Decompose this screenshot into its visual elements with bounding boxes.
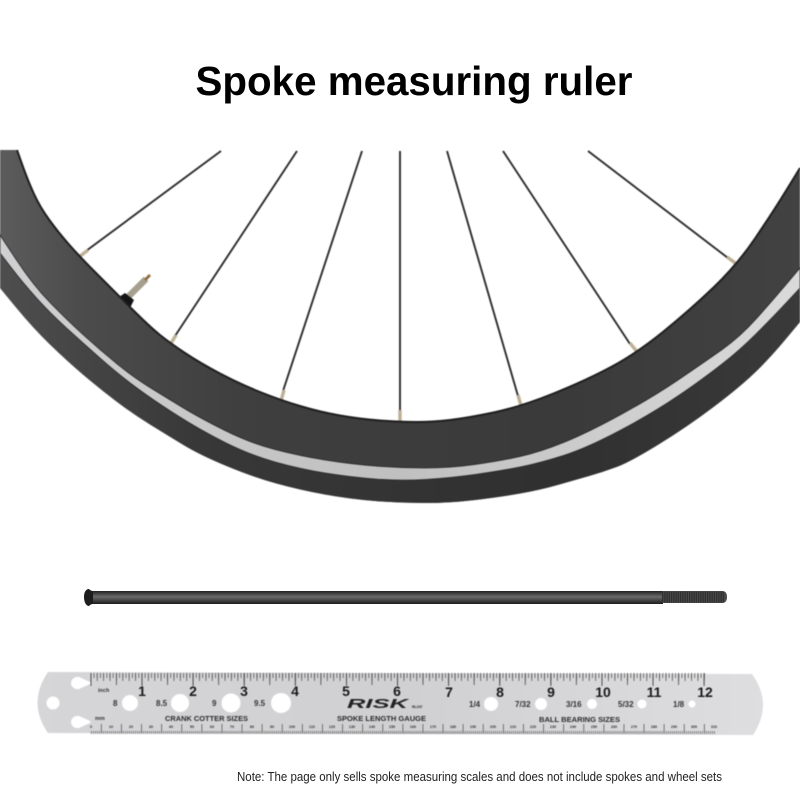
ruler	[38, 672, 763, 735]
section headings: BALL BEARING SIZES	[539, 715, 620, 724]
crank cotter labels: 8.5	[156, 699, 168, 708]
RISK logo	[347, 696, 423, 711]
inch scale ticks	[90, 676, 706, 680]
millimetre numbers: 120	[329, 725, 335, 729]
millimetre numbers: 300	[691, 725, 697, 729]
millimetre scale ticks	[91, 728, 716, 732]
section headings: CRANK COTTER SIZES	[165, 714, 248, 723]
millimetre numbers: 10	[109, 725, 113, 729]
millimetre numbers	[90, 725, 717, 729]
millimetre numbers: 140	[369, 725, 375, 729]
millimetre numbers: 210	[510, 725, 516, 729]
millimetre numbers: 70	[230, 725, 234, 729]
inch numbers: 7	[445, 684, 453, 700]
millimetre numbers: 60	[210, 725, 214, 729]
millimetre numbers: 0	[90, 725, 92, 729]
millimetre numbers: 220	[530, 725, 536, 729]
spoke shaft	[93, 591, 663, 604]
millimetre numbers: 200	[490, 725, 496, 729]
millimetre numbers: 40	[169, 725, 173, 729]
title: Spoke measuring ruler	[196, 58, 633, 104]
inch numbers: 9	[547, 684, 555, 700]
inch numbers: 6	[393, 683, 401, 699]
millimetre numbers: 90	[270, 725, 274, 729]
wheel photo	[0, 150, 800, 503]
millimetre numbers: 240	[570, 725, 576, 729]
inch numbers: 12	[697, 684, 713, 700]
ball bearing labels: 1/4	[469, 700, 481, 709]
spoke thread	[662, 591, 727, 603]
millimetre numbers: 180	[450, 725, 456, 729]
millimetre numbers: 270	[631, 725, 637, 729]
spokes	[79, 151, 738, 423]
millimetre numbers: 260	[611, 725, 617, 729]
millimetre numbers: 50	[190, 725, 194, 729]
millimetre numbers: 190	[470, 725, 476, 729]
millimetre numbers: 100	[289, 725, 295, 729]
inch numbers	[138, 683, 713, 700]
millimetre numbers: 30	[149, 725, 153, 729]
inch numbers: 10	[595, 684, 611, 700]
icon: valve	[116, 275, 150, 308]
inch numbers: 8	[496, 684, 504, 700]
section headings: SPOKE LENGTH GAUGE	[337, 714, 426, 723]
millimetre numbers: 80	[250, 725, 254, 729]
crank cotter labels: 9	[212, 699, 217, 708]
reflective band	[0, 235, 800, 480]
crank cotter labels	[113, 699, 266, 708]
RISK logo: RL237	[412, 705, 423, 709]
tyre	[0, 253, 800, 503]
section headings	[165, 714, 620, 724]
millimetre numbers: 20	[129, 725, 133, 729]
millimetre numbers: 130	[349, 725, 355, 729]
inch numbers: 2	[189, 683, 197, 699]
millimetre numbers: 310	[711, 725, 717, 729]
spoke head	[84, 589, 94, 606]
unit labels	[95, 688, 110, 722]
ball bearing labels: 3/16	[566, 700, 582, 709]
millimetre numbers: 150	[389, 725, 395, 729]
inch numbers: 3	[240, 683, 248, 699]
millimetre numbers: 160	[410, 725, 416, 729]
ball bearing labels	[469, 700, 685, 709]
millimetre numbers: 170	[430, 725, 436, 729]
ball bearing labels: 1/8	[673, 700, 685, 709]
unit labels: inch	[98, 688, 110, 694]
millimetre numbers: 290	[671, 725, 677, 729]
ruler body with holes	[38, 672, 763, 735]
inch numbers: 11	[647, 684, 662, 700]
crank cotter labels: 9.5	[254, 699, 266, 708]
note: Note: The page only sells spoke measuring scales and does not include spokes and wheel sets	[237, 770, 722, 784]
rim inner edge	[17, 150, 800, 422]
ball bearing labels: 5/32	[618, 700, 634, 709]
inch numbers: 1	[138, 683, 146, 699]
millimetre numbers: 230	[550, 725, 556, 729]
crank cotter labels: 8	[113, 699, 118, 708]
spoke	[84, 589, 727, 606]
rim	[0, 150, 800, 503]
unit labels: mm	[95, 716, 105, 722]
millimetre numbers: 280	[651, 725, 657, 729]
millimetre numbers: 250	[591, 725, 597, 729]
inch numbers: 4	[291, 683, 299, 699]
RISK logo: RISK	[347, 696, 411, 711]
ball bearing labels: 7/32	[515, 700, 531, 709]
millimetre numbers: 110	[309, 725, 315, 729]
inch numbers: 5	[342, 683, 350, 699]
